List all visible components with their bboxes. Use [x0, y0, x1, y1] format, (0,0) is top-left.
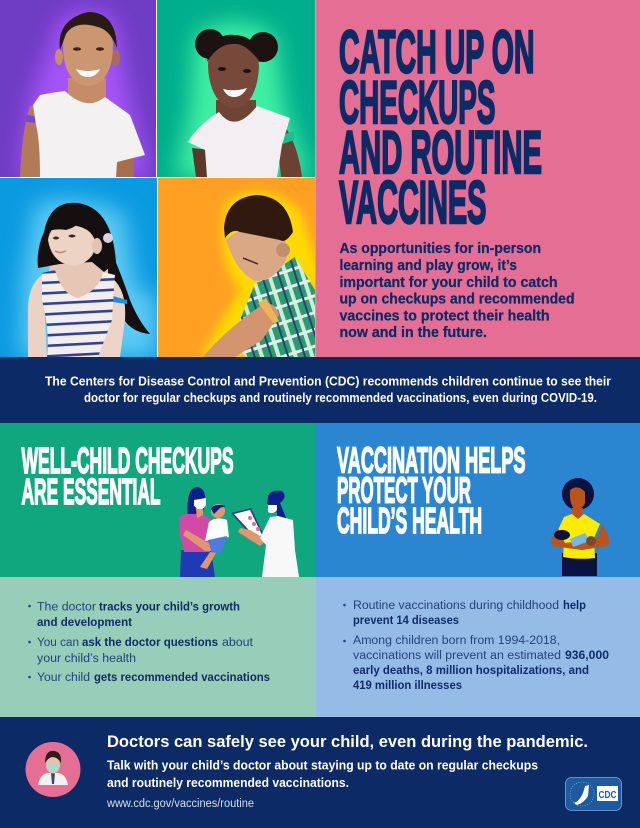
band: CDC recommendation [0, 357, 640, 423]
bullet: estimated prevention: vaccinations will prevent an estimated [353, 650, 561, 662]
photo panel: girl on green [157, 0, 315, 177]
panel: well-child checkups header [0, 423, 316, 577]
girl head with puffs [195, 29, 278, 100]
bullet: estimated prevention: Among children born from 1994-2018, [353, 635, 560, 647]
intro paragraph [340, 241, 574, 341]
panel: vaccination bullet list [316, 577, 640, 717]
white t-shirt [33, 91, 145, 177]
arms with blue bandage [28, 275, 127, 357]
bullet: questions: You can [37, 637, 79, 649]
logo: CDC: CDC [598, 790, 616, 801]
arms with green bandage [192, 125, 302, 177]
arm with tan bandage [203, 298, 279, 357]
illustration: mother holding baby [551, 478, 609, 576]
closing heading: Doctors can safely see your child, even during the pandemic. [107, 732, 588, 751]
bullet: estimated prevention [343, 635, 609, 692]
bullet: growth [28, 602, 240, 629]
title [339, 18, 542, 236]
panel: well-child bullet list [0, 577, 316, 717]
long dark hair [108, 262, 150, 334]
bullet: growth: tracks your child’s growth [99, 602, 240, 614]
striped tank top [42, 270, 115, 357]
bullet: estimated prevention: 419 million illnesses [353, 680, 462, 692]
photo panel: boy on purple [0, 0, 156, 177]
bullet: vaccinations: Your child [37, 672, 90, 684]
url: www.cdc.gov/vaccines/routine [106, 798, 254, 810]
bullet: vaccinations: gets recommended vaccinations [94, 672, 270, 684]
intro paragraph: up on checkups and recommended [340, 292, 574, 308]
logo: CDC [566, 778, 622, 810]
intro paragraph: now and in the future. [340, 325, 487, 341]
heading: CHILD’S HEALTH [337, 500, 482, 541]
heading [337, 440, 526, 541]
intro paragraph: As opportunities for in-person [340, 241, 541, 257]
intro paragraph: important for your child to catch [340, 275, 558, 291]
photo panel: girl on blue [0, 178, 157, 357]
bullet: 14 diseases: Routine vaccinations during childhood [353, 600, 559, 612]
illustration: mother, child and doctor [179, 487, 299, 577]
bullet: 14 diseases: prevent 14 diseases [353, 615, 459, 627]
footer band [0, 717, 640, 828]
intro paragraph: vaccines to protect their health [340, 308, 550, 324]
closing text: and routinely recommended vaccinations. [107, 776, 349, 790]
face [55, 12, 120, 86]
bullet: questions: ask the doctor questions [82, 637, 218, 649]
bullet: growth: The doctor [37, 602, 96, 614]
bullet: 14 diseases [343, 600, 586, 627]
panel: pink title panel [315, 0, 640, 357]
title: VACCINES [339, 169, 486, 236]
closing text [107, 758, 538, 790]
white shirt [188, 106, 290, 177]
icon: doctor in pink circle [26, 742, 80, 797]
bullet: questions [28, 637, 254, 665]
bullet: estimated prevention: 936,000 [565, 650, 609, 662]
panel: vaccination header [316, 423, 640, 577]
bullet: questions: about [222, 637, 254, 649]
plaid shirt [239, 257, 315, 357]
intro paragraph: learning and play grow, it’s [340, 258, 517, 274]
head with dark hair [38, 203, 116, 272]
heading: PROTECT YOUR [337, 470, 471, 510]
arm with purple bandage [20, 106, 42, 177]
band: CDC recommendation: The Centers for Disease Control and Prevention (CDC) recommends children continue to see their [45, 374, 611, 388]
heading [22, 440, 234, 512]
closing text: Talk with your child’s doctor about staying up to date on regular checkups [107, 758, 538, 772]
bullet: estimated prevention: early deaths, 8 million hospitalizations, and [353, 665, 589, 677]
boy head [224, 195, 293, 281]
bullet: 14 diseases: help [563, 600, 586, 612]
heading: ARE ESSENTIAL [22, 471, 160, 512]
panel: well-child checkups header: WELL-CHILD CHECKUPS [22, 440, 234, 481]
photo panel: boy on orange [158, 178, 320, 357]
bullet: growth: and development [37, 617, 132, 629]
bullet: questions: your child’s health [37, 653, 136, 665]
